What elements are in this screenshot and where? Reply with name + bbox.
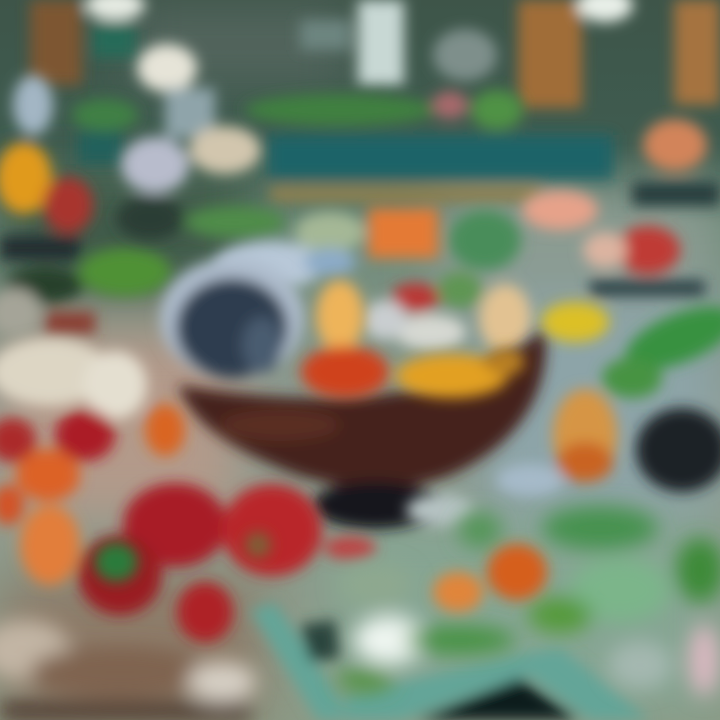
centre-left bottles	[116, 44, 285, 240]
blue cabbage	[160, 258, 304, 378]
wooden bowl	[178, 328, 546, 529]
red tomatoes and peppers left	[0, 338, 376, 642]
market stall background	[30, 0, 720, 108]
right side produce	[406, 119, 720, 526]
burlap sack bottom left	[0, 620, 256, 720]
teal counter with greens	[72, 90, 613, 202]
pepper stem	[94, 532, 271, 582]
bowl contents	[160, 258, 525, 398]
vegetables behind bowl	[215, 208, 531, 352]
left jar and oranges	[0, 75, 171, 336]
herbs and carrots	[337, 506, 720, 696]
peppers in bowl	[301, 280, 525, 398]
carrots	[433, 544, 547, 612]
green tray bottom right	[250, 602, 650, 720]
